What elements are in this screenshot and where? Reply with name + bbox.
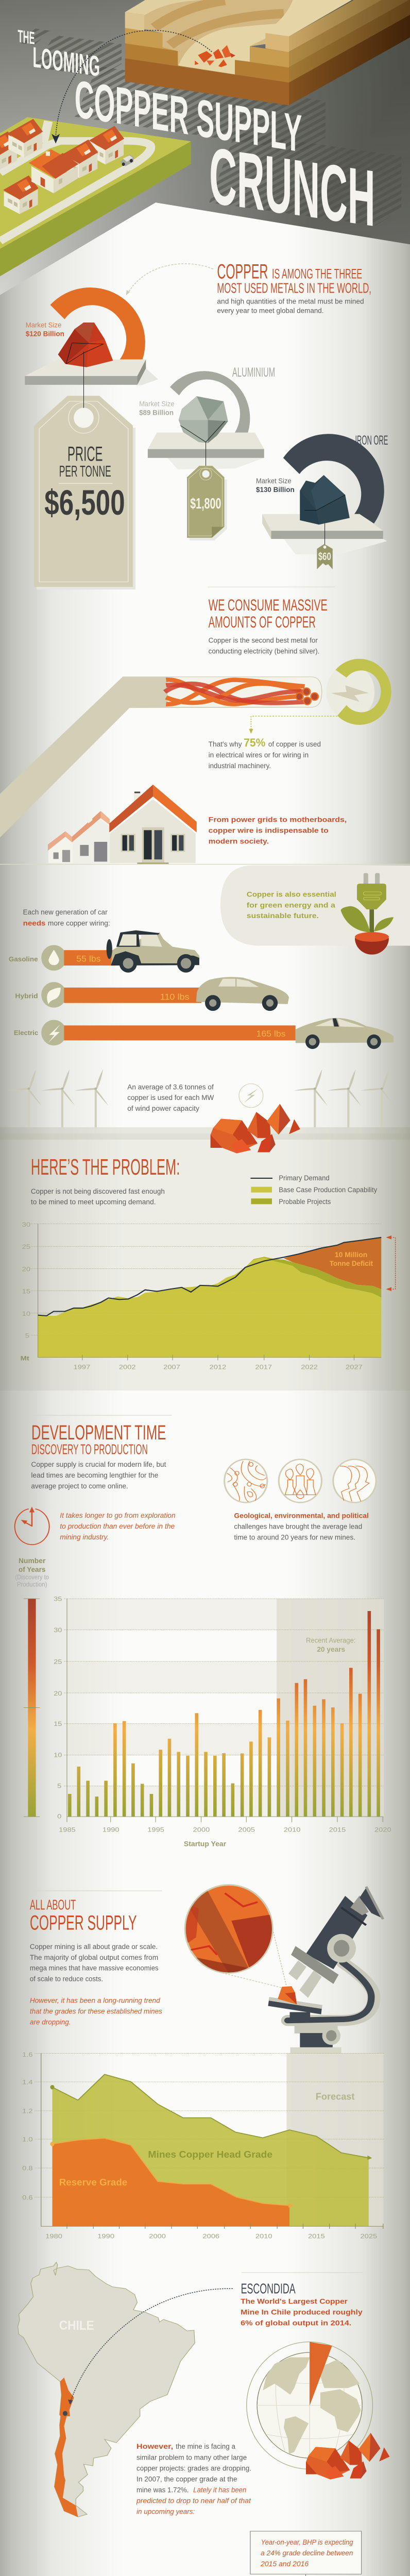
text: grades dropping: are dropping. [30, 2019, 71, 2026]
heading: copper among three most used metals [217, 260, 371, 296]
car: sedan [296, 1018, 394, 1049]
tag: aluminium price: $1,800 [190, 495, 221, 512]
label: recent average: Recent Average: [306, 1637, 355, 1645]
text: longer exploration: It takes longer to go from exploration [60, 1512, 176, 1520]
title shadows [18, 29, 401, 226]
y labels: 5 [57, 1783, 61, 1789]
text: green energy [247, 891, 336, 920]
row: gasoline [9, 930, 199, 973]
legend: demand chart: Probable Projects [279, 1198, 331, 1206]
text: Escondida grades dropping: in upcoming years: [136, 2507, 195, 2516]
y axis labels: 20 [22, 1266, 30, 1273]
text: problem description [31, 1188, 165, 1206]
panel: problem section background [0, 1127, 410, 1391]
text: lead times: average project to come online. [31, 1482, 128, 1490]
x axis labels: 2002 [119, 1363, 136, 1370]
text: Escondida grades dropping: copper projects: grades are dropping. [136, 2465, 251, 2472]
label: deficit: 10 Million [335, 1251, 367, 1259]
series labels: Reserve Grade [59, 2177, 127, 2188]
text: Escondida grades dropping: predicted to drop to near half of that [136, 2497, 251, 2505]
text: global demand: every year to meet global demand. [217, 307, 324, 315]
callout: BHP grade decline: a 24% grade decline between [261, 2549, 353, 2557]
text: aluminium market size: $89 Billion [139, 409, 174, 417]
heading: development time: DEVELOPMENT TIME [31, 1421, 166, 1444]
x labels: 1985 [59, 1826, 76, 1833]
wind turbines left [8, 1069, 108, 1127]
reserve grade area [53, 2138, 289, 2226]
axis title: startup year: Startup Year [184, 1840, 226, 1848]
text: aluminium market size [139, 400, 175, 417]
land masses [263, 2357, 361, 2454]
text: power grids to motherboards [209, 816, 347, 845]
text: longer exploration: to production than ever before in the [60, 1522, 175, 1531]
text: challenges [234, 1512, 369, 1541]
head grade line [50, 2074, 372, 2160]
row: hybrid: Hybrid [15, 992, 38, 1000]
heading: we consume massive amounts [209, 597, 328, 631]
tag: copper price: $6,500 [44, 483, 125, 522]
text: challenges: Geological, environmental, and political [234, 1512, 369, 1520]
text: Escondida grades dropping: However, [136, 2443, 173, 2451]
text: grades dropping: However, it has been a long-running trend [30, 1997, 161, 2005]
y axis labels [21, 1221, 30, 1362]
text: grade or scale: The majority of global output comes from [30, 1954, 158, 1961]
label: Chile: CHILE [59, 2318, 94, 2333]
y labels: 30 [54, 1626, 62, 1634]
chart: demand vs supply [21, 1221, 396, 1370]
reserve grade line [50, 2138, 294, 2208]
text: Escondida grades dropping: Lately it has been [193, 2486, 246, 2494]
rock: copper [58, 323, 113, 367]
text: Escondida grades dropping [136, 2443, 251, 2516]
y labels: 0.6 [22, 2194, 33, 2201]
text: grade or scale: Copper mining is all about grade or scale. [30, 1943, 158, 1951]
copper strands [165, 680, 309, 704]
label: number of years: Production) [17, 1581, 47, 1588]
text: grades dropping: that the grades for these established mines [30, 2008, 162, 2015]
text: problem description: to be mined to meet upcoming demand. [31, 1198, 156, 1206]
heading: all about copper supply [30, 1896, 137, 1935]
title text [18, 27, 375, 244]
text: conductivity: conducting electricity (behind silver). [209, 648, 319, 655]
text: global demand: and high quantities of the metal must be mined [217, 298, 364, 306]
tag: iron ore price: $60 [318, 550, 331, 563]
row: hybrid [15, 977, 289, 1011]
y axis labels: 5 [25, 1332, 29, 1339]
callout: BHP grade decline: Year-on-year, BHP is expecting [261, 2538, 353, 2547]
panel: green energy callout [220, 866, 410, 955]
legend: demand chart: Base Case Production Capability [279, 1186, 377, 1194]
header gray backdrop [0, 0, 410, 295]
text: conductivity [209, 637, 319, 655]
text: wind power [127, 1083, 214, 1113]
rock: iron ore [300, 475, 350, 524]
panel: header [0, 0, 410, 360]
text: power grids to motherboards: From power grids to motherboards, [209, 816, 347, 824]
icon: environmental cooling towers [279, 1460, 321, 1502]
text: green energy: sustainable future. [247, 912, 319, 920]
text: Escondida description: The World's Largest Copper [241, 2298, 348, 2306]
text: iron ore market size: Market Size [256, 477, 292, 485]
icon: lightning circle [239, 1084, 263, 1108]
shelf: iron ore [262, 514, 387, 554]
shelf: aluminium [148, 433, 264, 469]
icon: copper ore cluster by globe [306, 2433, 390, 2480]
ring: copper market size [50, 287, 145, 360]
illustration: open pit mine [125, 0, 410, 105]
x axis labels: 1997 [74, 1363, 90, 1370]
label: deficit: Tonne Deficit [330, 1260, 373, 1268]
legend: demand chart: Primary Demand [279, 1174, 330, 1182]
text: grade or scale: of scale to reduce costs. [30, 1975, 103, 1983]
x labels: 1990 [102, 1826, 119, 1833]
ring: aluminium market size [170, 371, 250, 433]
heading: Escondida: ESCONDIDA [241, 2280, 296, 2297]
heading: all about copper supply: ALL ABOUT [30, 1896, 76, 1913]
title text: THE [18, 27, 35, 48]
text: car generations: needs [23, 920, 45, 927]
y labels: 25 [54, 1658, 62, 1665]
icon: plant plug [341, 873, 394, 955]
label: number of years [15, 1557, 49, 1588]
legend: demand chart [250, 1174, 377, 1206]
tag: copper price: PRICE [67, 443, 103, 465]
map: South America [18, 2262, 195, 2517]
arrow: green dashed to 75 percent [249, 716, 337, 734]
x labels: 2006 [202, 2233, 219, 2240]
row: electric: 165 lbs [257, 1029, 285, 1039]
icon: geological contour map [225, 1460, 267, 1502]
illustration: magnified copper sample [183, 1885, 286, 1988]
text: Escondida description: 6% of global output in 2014. [241, 2319, 351, 2327]
label: deficit [330, 1251, 373, 1268]
row: gasoline: Gasoline [9, 956, 38, 963]
chart: copper grades [22, 2051, 384, 2240]
text: lead times: lead times are becoming lengthier for the [31, 1471, 158, 1480]
text: green energy: for green energy and a [247, 901, 335, 909]
text: Escondida description: Mine In Chile produced roughly [241, 2309, 363, 2316]
small car [120, 155, 134, 166]
large house [29, 149, 78, 193]
text: Escondida description [241, 2298, 363, 2327]
heading: development time: DISCOVERY TO PRODUCTION [31, 1442, 148, 1458]
y labels: 0.8 [22, 2165, 33, 2172]
rock: aluminium [179, 396, 228, 443]
x axis labels: 2017 [255, 1363, 272, 1370]
heading: all about copper supply: COPPER SUPPLY [30, 1911, 137, 1935]
x labels: 2020 [374, 1826, 391, 1833]
tag: iron ore price [317, 523, 333, 569]
x labels: 1995 [147, 1826, 164, 1833]
arrow: mine to suburb [52, 30, 212, 144]
y labels: 20 [54, 1690, 62, 1697]
y labels [54, 1595, 62, 1820]
text: car generations [23, 908, 110, 927]
text: HERE’S THE PROBLEM: [31, 1155, 180, 1180]
text: Escondida grades dropping: similar problem to many other large [136, 2454, 247, 2462]
x labels: 2025 [360, 2233, 377, 2240]
text: 75 percent in wiring [209, 737, 321, 770]
text: problem description: Copper is not being discovered fast enough [31, 1188, 165, 1195]
tag: aluminium price [187, 442, 227, 540]
heading: aluminium: ALUMINIUM [232, 365, 275, 380]
text: aluminium market size: Market Size [139, 400, 175, 408]
text: copper market size: $120 Billion [26, 330, 64, 338]
heading: development time [31, 1421, 166, 1458]
callout: BHP grade decline [250, 2531, 362, 2576]
illustration: three houses [48, 785, 197, 865]
text: grades dropping [30, 1997, 162, 2026]
text: power grids to motherboards: modern society. [209, 838, 269, 845]
primary demand line [38, 1238, 381, 1316]
arrow: dashed to copper ring [126, 264, 213, 295]
label: number of years: Number [19, 1557, 45, 1565]
copper ore in pit [195, 45, 235, 67]
y labels: 1.0 [22, 2136, 33, 2143]
y axis labels: 30 [22, 1221, 30, 1228]
text: 75 percent in wiring: 75% [244, 737, 266, 749]
text: iron ore market size: $130 Billion [256, 486, 295, 494]
shelf: copper [25, 360, 158, 385]
y labels: 1.4 [22, 2079, 33, 2086]
recent shading [67, 1599, 384, 1817]
text: Escondida grades dropping: In 2007, the copper grade at the [136, 2476, 237, 2483]
text: global demand [217, 298, 364, 315]
y labels: 1.6 [22, 2051, 33, 2058]
text: longer exploration: mining industry. [60, 1533, 109, 1541]
x labels [59, 1826, 391, 1833]
text: power grids to motherboards: copper wire is indispensable to [209, 827, 329, 835]
text: grade or scale: mega mines that have massive economies [30, 1964, 159, 1972]
wire ends [296, 688, 318, 705]
ring: iron ore market size [283, 434, 384, 523]
callout: BHP grade decline: 2015 and 2016 [260, 2560, 309, 2568]
text: wind power: of wind power capacity [127, 1105, 199, 1113]
deficit area [284, 1238, 381, 1289]
label: recent average [306, 1637, 355, 1654]
tag: copper price: PER TONNE [59, 463, 111, 480]
x axis labels: 2007 [163, 1363, 180, 1370]
axes [67, 1599, 383, 1822]
icon: political faces [333, 1460, 376, 1502]
illustration: copper wire band [0, 676, 322, 837]
text: car generations: Each new generation of car [23, 908, 108, 917]
x labels: 2010 [255, 2233, 272, 2240]
x labels: 2015 [308, 2233, 325, 2240]
y axis labels: 15 [22, 1287, 30, 1295]
scale bar: years gradient [24, 1599, 40, 1817]
label: number of years: (Discovery to [15, 1573, 49, 1581]
ring: 75 percent with bolt [327, 659, 391, 725]
row: electric [14, 1018, 394, 1049]
row: hybrid: 110 lbs [160, 992, 190, 1002]
head grade area [53, 2074, 369, 2226]
axes [38, 1224, 381, 1360]
x axis labels: 2012 [210, 1363, 226, 1370]
Chile highlight [55, 2378, 78, 2517]
y labels: 0 [57, 1813, 62, 1820]
label: number of years: of Years [19, 1566, 45, 1574]
tag: copper price [34, 352, 135, 589]
x labels [45, 2233, 377, 2240]
y labels: 15 [54, 1720, 62, 1727]
x labels: 2015 [329, 1826, 346, 1833]
arrow: Escondida to Chile [63, 2289, 233, 2416]
text: conductivity: Copper is the second best metal for [209, 637, 318, 645]
text: challenges: challenges have brought the average lead [234, 1523, 362, 1531]
text: 75 percent in wiring: of copper is used [268, 740, 321, 749]
chart: development time bars [54, 1595, 391, 1848]
text: iron ore market size [256, 477, 295, 494]
y labels: 35 [54, 1595, 62, 1602]
base case area [38, 1258, 381, 1358]
text: copper market size [26, 321, 64, 338]
y axis labels: 10 [22, 1310, 30, 1317]
text: 75 percent in wiring: in electrical wires or for wiring in [209, 751, 309, 759]
x axis labels: 2027 [346, 1363, 363, 1370]
text: 75 percent in wiring: That's why [209, 740, 242, 749]
text: grade or scale [30, 1943, 159, 1983]
y axis labels: Mt [21, 1355, 29, 1362]
arrow: deficit bracket [386, 1235, 396, 1291]
y axis labels: 25 [22, 1243, 30, 1250]
series labels: Mines Copper Head Grade [148, 2149, 272, 2160]
text: 75 percent in wiring: industrial machinery. [209, 762, 271, 770]
label: recent average: 20 years [317, 1646, 345, 1654]
text: lead times [31, 1461, 166, 1490]
bars [70, 1611, 379, 1817]
illustration: suburb block [0, 117, 191, 276]
row: electric: Electric [14, 1029, 38, 1037]
y labels: 10 [54, 1752, 62, 1758]
text: challenges: time to around 20 years for new mines. [234, 1534, 355, 1541]
icon: copper ore cluster [211, 1104, 300, 1154]
car: hatchback [196, 977, 289, 1011]
icon: clock [15, 1506, 49, 1545]
text: car generations: more copper wiring: [48, 920, 110, 927]
car: jeep [107, 930, 199, 973]
x labels: 2000 [193, 1826, 210, 1833]
x axis labels [74, 1363, 363, 1370]
illustration: globe with 6 percent wedge [247, 2342, 372, 2469]
y labels: 1.2 [22, 2108, 33, 2114]
text: wind power: An average of 3.6 tonnes of [127, 1083, 214, 1091]
series labels [59, 2091, 355, 2188]
x labels: 1980 [45, 2233, 62, 2240]
houses [0, 119, 124, 214]
text: copper market size: Market Size [26, 321, 61, 329]
illustration: microscope [268, 1887, 383, 2054]
x labels: 2000 [149, 2233, 166, 2240]
x labels: 2010 [284, 1826, 301, 1833]
axes [41, 2053, 384, 2229]
text: green energy: Copper is also essential [247, 891, 336, 899]
text: lead times: Copper supply is crucial for modern life, but [31, 1461, 166, 1469]
x labels: 1990 [97, 2233, 114, 2240]
x labels: 2005 [238, 1826, 255, 1833]
probable projects area [246, 1257, 381, 1300]
x axis labels: 2022 [301, 1363, 318, 1370]
sample rock [278, 1986, 297, 2005]
forecast shading [286, 2053, 383, 2226]
wind turbines right [294, 1069, 395, 1127]
heading: copper among three most used metals: COPPER [217, 260, 268, 283]
text: wind power: copper is used for each MW [127, 1094, 214, 1102]
y labels [22, 2051, 33, 2201]
text: Escondida grades dropping: the mine is facing a [176, 2443, 235, 2451]
text: Escondida grades dropping: mine was 1.72%. [136, 2486, 189, 2494]
text: longer exploration [60, 1512, 176, 1541]
row: gasoline: 55 lbs [76, 954, 101, 963]
series labels: Forecast [316, 2091, 355, 2102]
title text: LOOMING [32, 41, 100, 83]
